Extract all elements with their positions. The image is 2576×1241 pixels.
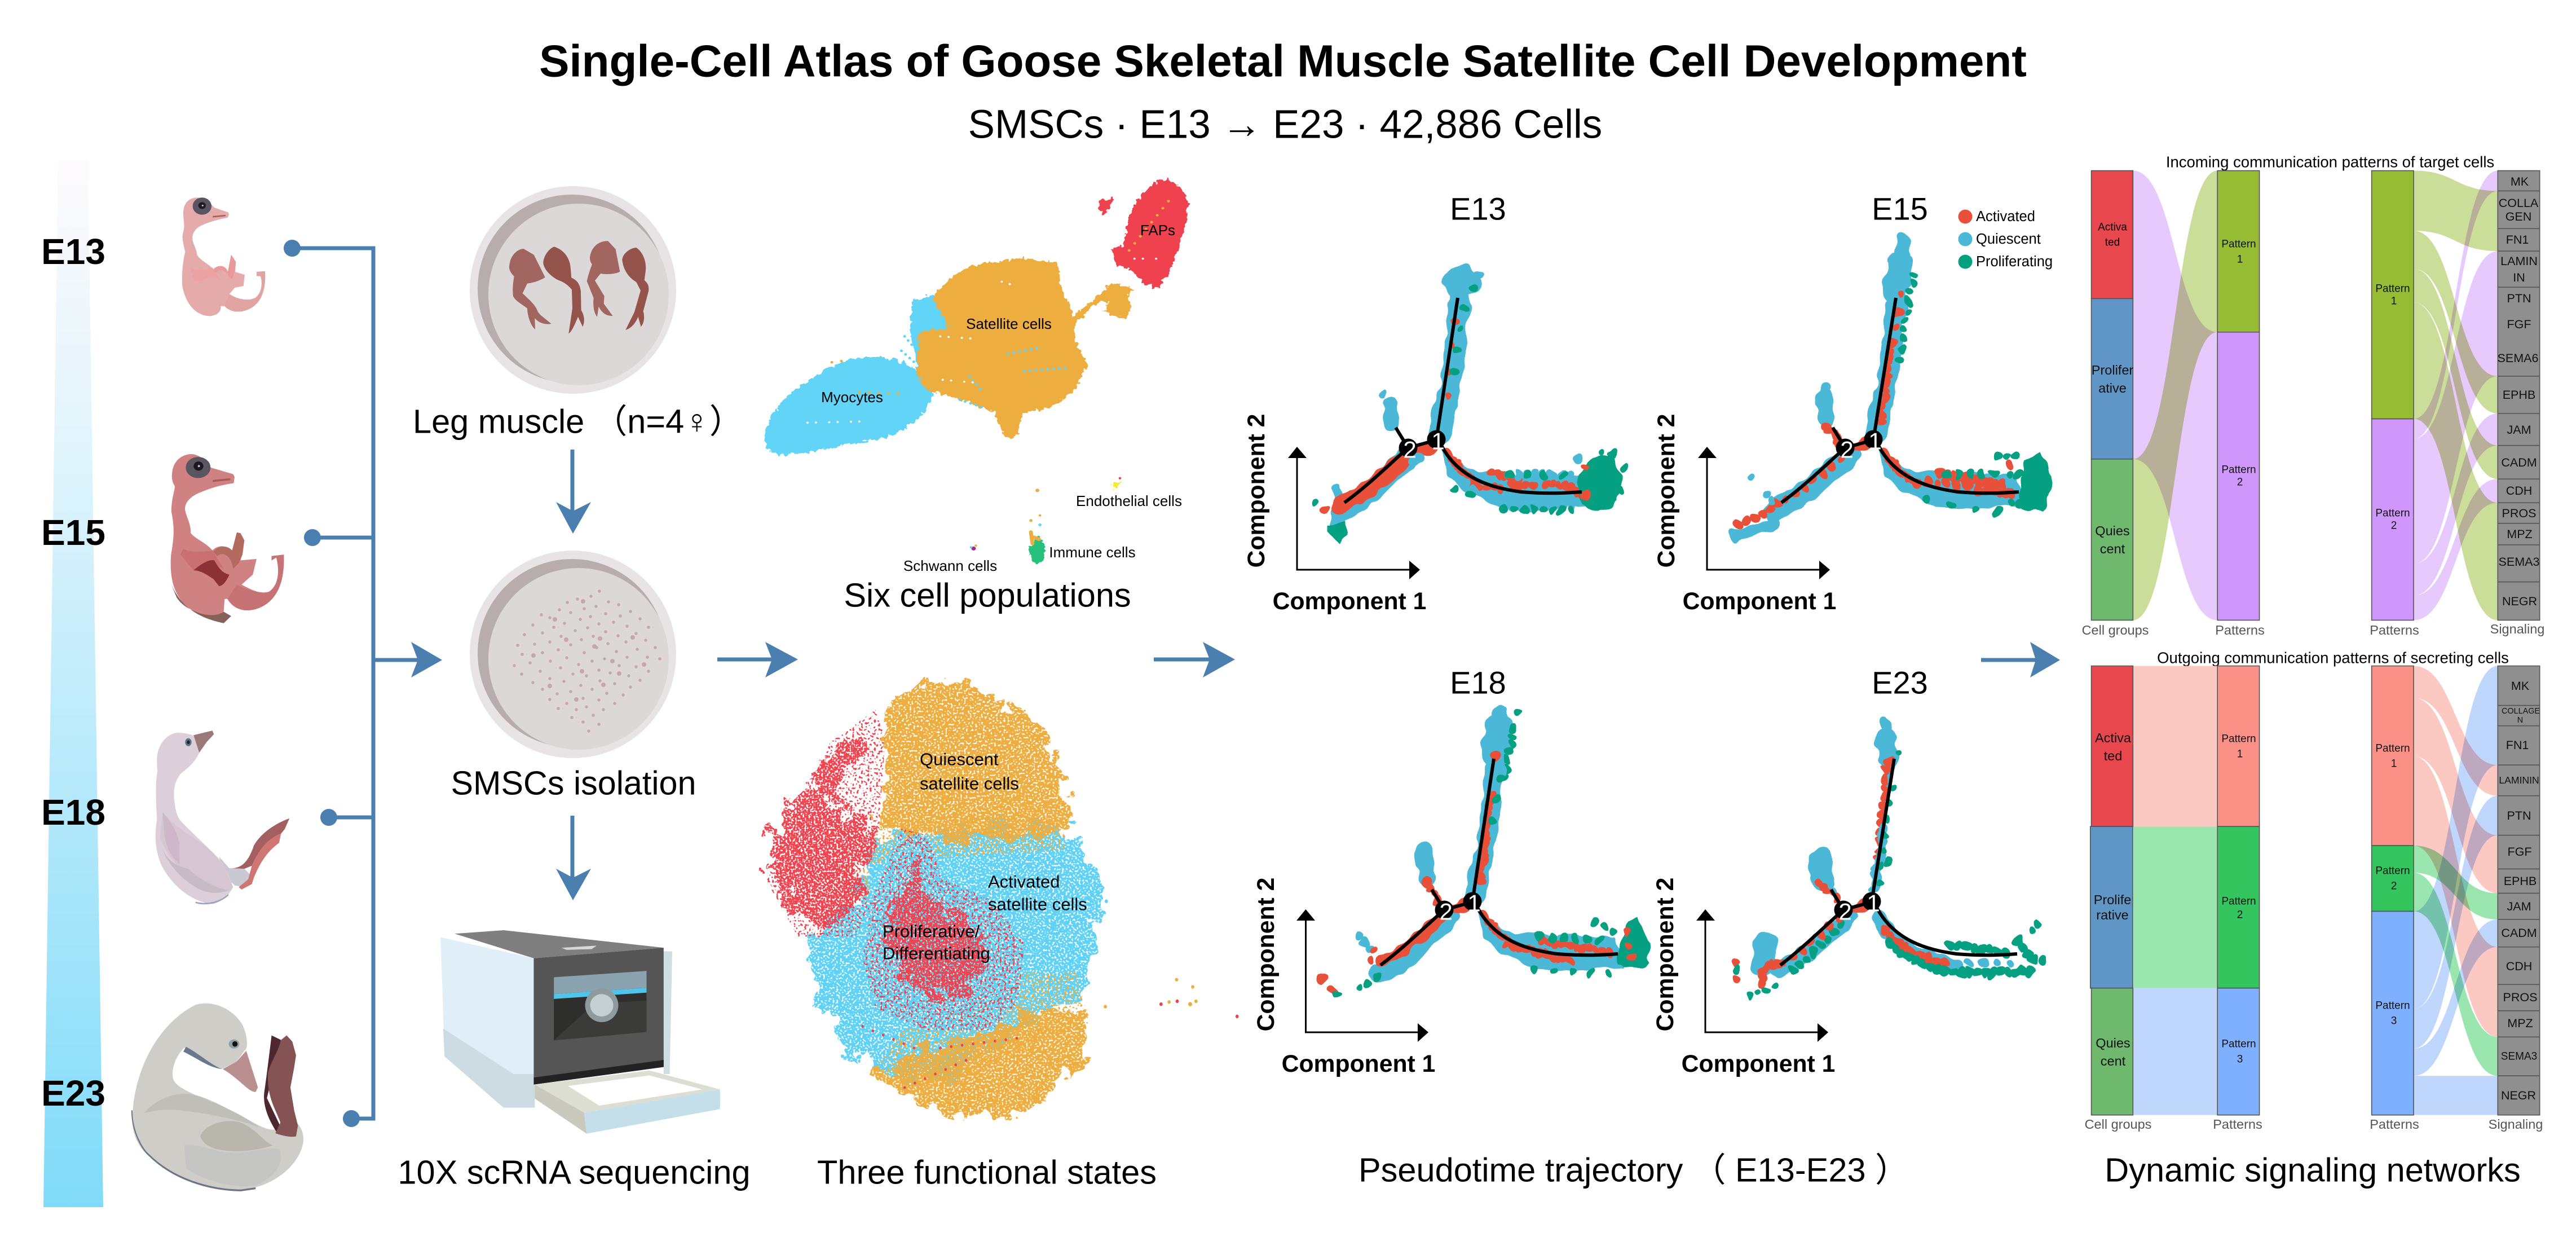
icon: 10X sequencer (440, 930, 720, 1134)
sankey: outgoing patterns to signaling (2372, 666, 2540, 1115)
icon: E23 gosling (132, 1004, 303, 1190)
cell group labels: rative (2096, 908, 2129, 922)
axis labels: Signaling (2489, 1117, 2543, 1132)
pattern labels: Pattern (2221, 733, 2256, 745)
signaling labels: PTN (2507, 809, 2531, 822)
axis labels: Cell groups (2085, 1117, 2151, 1132)
trajectory: 1 (1467, 890, 1481, 916)
signaling labels: SEMA3 (2501, 1050, 2537, 1063)
pattern labels: Pattern (2375, 508, 2410, 519)
pattern labels: 2 (2391, 520, 2397, 531)
label: pseudotime trajectory: Pseudotime trajectory （ E13-E23 ） (1358, 1151, 1909, 1189)
cell group labels (2094, 730, 2132, 1068)
pattern labels: 3 (2237, 1054, 2243, 1065)
label: E13: E13 (41, 231, 105, 272)
pattern labels: Pattern (2375, 742, 2410, 755)
pattern labels: Pattern (2375, 283, 2410, 294)
axis labels: Patterns (2370, 623, 2419, 637)
cell group labels (2092, 221, 2133, 556)
chart: red proliferative cells (764, 735, 986, 998)
signaling labels: MPZ (2507, 1016, 2533, 1030)
signaling labels: NEGR (2502, 595, 2537, 608)
panel: pseudotime E15 (1653, 191, 2051, 615)
signaling labels: PROS (2502, 507, 2536, 520)
cell group labels: ted (2104, 749, 2122, 763)
chart: sparse red cells (765, 710, 1025, 1030)
trajectory: 1 (1867, 890, 1880, 916)
axis label: component 1: Component 1 (1282, 1050, 1435, 1077)
label: three functional states: Three functional states (817, 1153, 1157, 1191)
cell group labels: cent (2100, 542, 2125, 556)
cell group labels: Quies (2095, 523, 2130, 538)
label: E15: E15 (41, 512, 105, 553)
pattern labels: 2 (2237, 476, 2243, 489)
signaling labels: MPZ (2507, 527, 2533, 541)
pattern labels (2221, 733, 2410, 1065)
cell group labels: Prolife (2094, 892, 2131, 907)
icon: leg muscle dish (470, 186, 676, 394)
icon: isolated cells dish (470, 551, 676, 758)
signaling labels: CDH (2506, 960, 2532, 973)
outlier cells (863, 900, 1239, 1088)
cell group labels: Activa (2095, 730, 2132, 745)
signaling labels: EPHB (2503, 388, 2535, 402)
heading: E23: E23 (1872, 664, 1928, 701)
axis label: component 2: Component 2 (1652, 878, 1679, 1031)
label: six cell populations: Six cell populations (844, 577, 1131, 614)
pattern labels: Pattern (2221, 1038, 2256, 1050)
pattern labels: Pattern (2221, 464, 2256, 476)
icon: E15 embryo (170, 454, 284, 623)
signaling labels: PROS (2503, 991, 2537, 1004)
axis labels: Patterns (2213, 1117, 2262, 1132)
signaling labels: FGF (2507, 845, 2532, 859)
subtitle: SMSCs · E13 → E23 · 42,886 Cells (968, 103, 1602, 147)
signaling labels: MK (2511, 175, 2529, 188)
pattern labels: Pattern (2375, 865, 2410, 877)
heading: incoming: Incoming communication patterns of target cells (2166, 153, 2494, 170)
heading: E13: E13 (1450, 191, 1506, 227)
axis label: component 2: Component 2 (1653, 414, 1680, 567)
icon: E13 embryo (182, 197, 265, 316)
pattern labels: 1 (2391, 758, 2397, 769)
signaling labels: PTN (2507, 292, 2531, 305)
label: Myocytes: Myocytes (821, 389, 883, 406)
signaling labels: JAM (2507, 423, 2531, 437)
pattern labels: 1 (2237, 748, 2243, 760)
signaling labels: SEMA6 (2498, 351, 2538, 365)
chart: sparse orange transition cells (827, 818, 1089, 1095)
icon: E18 embryo (156, 730, 289, 904)
cell group labels: Quies (2096, 1036, 2131, 1050)
axis labels: Signaling (2490, 622, 2544, 636)
legend: Quiescent (1976, 231, 2041, 247)
signaling labels: COLLA (2499, 196, 2539, 210)
heading: E18: E18 (1450, 664, 1506, 701)
arrow: dish to isolation (556, 450, 591, 534)
axis label: component 1: Component 1 (1273, 588, 1426, 615)
signaling labels: N (2517, 716, 2523, 725)
timeline gradient bar (43, 161, 103, 1207)
pattern labels: 3 (2391, 1015, 2397, 1027)
axis label: component 2: Component 2 (1243, 414, 1270, 567)
axis labels (2085, 1117, 2543, 1132)
label: activated satellite cells: Activated (988, 872, 1060, 891)
label: 10X scRNA sequencing: 10X scRNA sequencing (398, 1153, 751, 1191)
label: FAPs: FAPs (1140, 222, 1175, 239)
label: dynamic signaling networks: Dynamic signaling networks (2105, 1151, 2521, 1189)
signaling labels: FN1 (2506, 738, 2529, 752)
trajectory: 2 (1403, 437, 1417, 463)
label: Endothelial cells: Endothelial cells (1076, 492, 1182, 509)
legend: Activated (1976, 209, 2035, 225)
trajectory (1735, 240, 2051, 536)
signaling labels: SEMA3 (2499, 555, 2539, 569)
label: quiescent satellite cells: Quiescent (920, 749, 999, 769)
cell group labels: Prolifer (2092, 363, 2133, 377)
axes (1696, 909, 1828, 1042)
panel: pseudotime E13 (1243, 191, 1627, 615)
scattered outlier cells (808, 201, 1168, 551)
signaling labels: CDH (2506, 484, 2532, 498)
axis label: component 1: Component 1 (1682, 1050, 1835, 1077)
label: differentiating: Differentiating (883, 943, 990, 963)
sankey: outgoing cell groups to patterns (2090, 666, 2260, 1115)
signaling labels: JAM (2507, 900, 2531, 913)
signaling labels (2499, 679, 2540, 1102)
signaling labels: EPHB (2504, 874, 2537, 888)
signaling labels: COLLAGE (2502, 707, 2540, 716)
chart: orange quiescent cells (874, 683, 1089, 1120)
axes (1296, 909, 1428, 1042)
pattern labels (2221, 238, 2410, 531)
label: quiescent satellite cells line two: satellite cells (920, 774, 1019, 793)
cell group labels: Activa (2098, 221, 2127, 234)
panel: developmental timeline (41, 161, 105, 1207)
label: SMSCs isolation: SMSCs isolation (451, 764, 696, 802)
sankey: incoming cell groups to patterns (2092, 171, 2260, 620)
panel: pseudotime E18 (1252, 664, 1650, 1077)
label: proliferative: Proliferative/ (883, 922, 980, 941)
trajectory: 2 (1840, 437, 1854, 463)
axis label: component 2: Component 2 (1252, 878, 1280, 1031)
trajectory (1313, 265, 1627, 544)
pattern labels: Pattern (2221, 238, 2256, 250)
signaling labels: NEGR (2501, 1089, 2536, 1102)
signaling labels (2498, 175, 2539, 608)
signaling labels: FGF (2507, 318, 2531, 331)
trajectory (1317, 707, 1650, 999)
signaling labels: IN (2513, 271, 2525, 284)
trajectory (1732, 721, 2049, 999)
cell group labels: ative (2098, 381, 2127, 395)
arrow: to trajectories (1154, 642, 1235, 677)
trajectory: 1 (1868, 428, 1882, 455)
pattern labels: Pattern (2375, 1000, 2410, 1012)
panel: incoming communication patterns (2082, 153, 2544, 637)
panel: UMAP of six cell populations (767, 181, 1186, 574)
cell group labels: ted (2105, 237, 2120, 248)
label: leg muscle: Leg muscle （n=4♀） (413, 403, 743, 440)
signaling labels: GEN (2506, 210, 2531, 223)
arrow: to signaling (1981, 642, 2060, 677)
axes (1698, 447, 1830, 579)
axis labels: Patterns (2370, 1117, 2419, 1132)
cell group labels: cent (2101, 1054, 2126, 1068)
pattern labels: 2 (2237, 909, 2243, 921)
heading: E15: E15 (1872, 191, 1928, 227)
label: Satellite cells: Satellite cells (966, 315, 1052, 332)
label: activated satellite cells line two: satellite cells (988, 895, 1087, 914)
pattern labels: 1 (2391, 296, 2397, 307)
signaling labels: FN1 (2506, 233, 2529, 247)
connector: stages to isolation (284, 240, 442, 1127)
legend (1958, 209, 2053, 270)
label: E23: E23 (41, 1073, 105, 1114)
pattern labels: Pattern (2221, 896, 2256, 907)
trajectory: 2 (1439, 898, 1453, 925)
chart: cyan activated cells (811, 825, 1102, 1084)
title: Single-Cell Atlas of Goose Skeletal Muscle Satellite Cell Development (539, 36, 2027, 86)
axes (1288, 447, 1420, 579)
panel: pseudotime E23 (1652, 664, 2049, 1077)
sankey: incoming patterns to signaling (2372, 171, 2540, 620)
signaling labels: MK (2511, 679, 2530, 693)
arrow: to clustering (717, 642, 798, 677)
label: E18: E18 (41, 792, 105, 833)
axis labels: Cell groups (2082, 623, 2149, 637)
axis label: component 1: Component 1 (1683, 588, 1836, 615)
pattern labels: 1 (2237, 254, 2243, 265)
signaling labels: CADM (2501, 926, 2537, 940)
arrow: isolation to sequencing (556, 816, 591, 900)
chart: UMAP clusters (767, 181, 1186, 562)
trajectory: 2 (1838, 898, 1852, 925)
legend: Proliferating (1976, 254, 2053, 270)
signaling labels: LAMIN (2500, 254, 2538, 268)
axis labels (2082, 622, 2544, 637)
trajectory: 1 (1431, 428, 1445, 455)
signaling labels: CADM (2501, 456, 2537, 469)
signaling labels: LAMININ (2499, 774, 2539, 786)
label: Schwann cells: Schwann cells (903, 557, 997, 574)
pattern labels: 2 (2391, 880, 2397, 892)
heading: outgoing: Outgoing communication patterns of secreting cells (2157, 649, 2509, 667)
axis labels: Patterns (2215, 623, 2265, 637)
label: Immune cells: Immune cells (1049, 544, 1136, 561)
panel: outgoing communication patterns (2085, 649, 2543, 1132)
panel: three functional states scatter (764, 683, 1239, 1120)
